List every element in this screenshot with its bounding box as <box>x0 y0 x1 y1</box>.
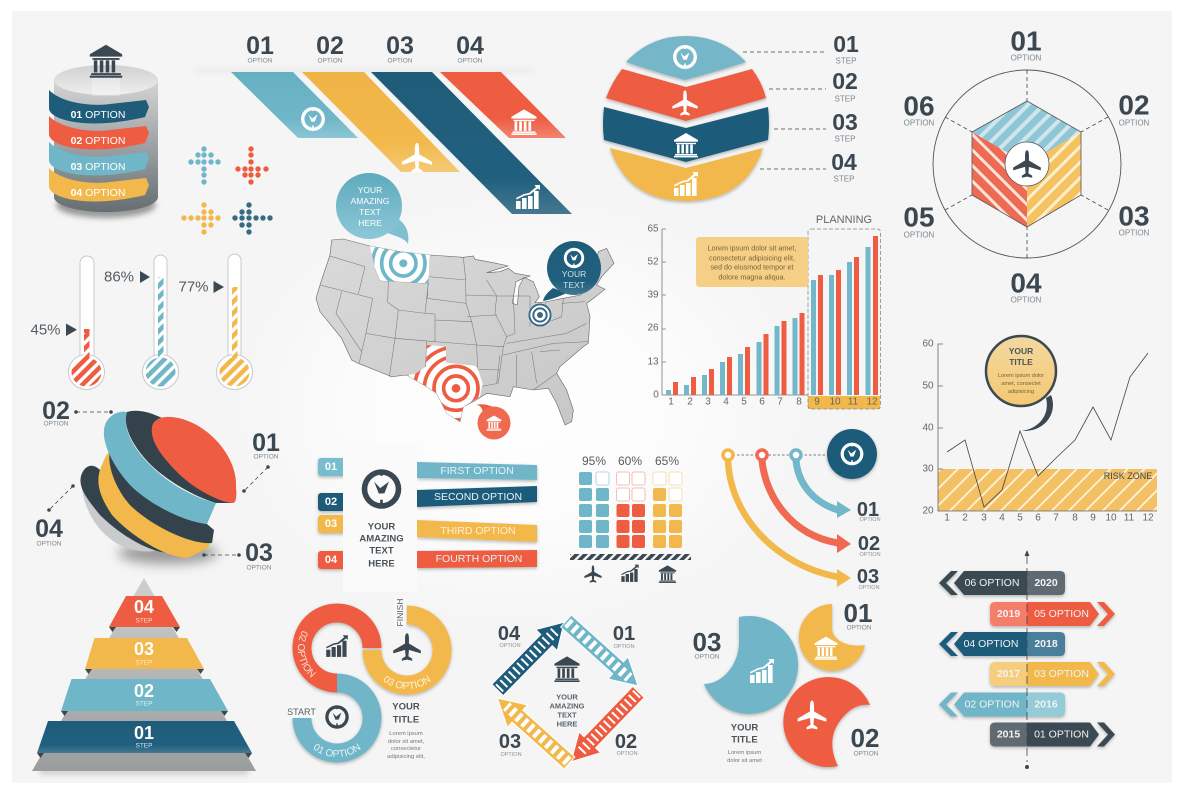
center glow <box>230 190 810 630</box>
panel: slanted option bands: OPTION <box>458 58 483 64</box>
panel: hexagon radar: 01 <box>1010 26 1042 56</box>
callout: navy bubble: TEXT <box>563 280 585 290</box>
panel: thermometers: 77% <box>178 278 209 296</box>
panel: step pyramid: 04 <box>134 597 154 617</box>
panel: layered sphere: OPTION <box>44 420 69 428</box>
bar chart: PLANNING <box>816 214 872 226</box>
panel: curved arrows <box>723 429 881 591</box>
line chart: RISK ZONE <box>1104 471 1152 481</box>
panel: circular steps: STEP <box>836 56 856 66</box>
callout: teal bubble: AMAZING <box>351 196 389 206</box>
panel: timeline: 05 OPTION <box>1034 608 1089 620</box>
panel: S-curve flow: START <box>287 707 316 717</box>
panel: timeline: 06 OPTION <box>965 577 1019 589</box>
bar chart: 3 <box>705 396 711 408</box>
bar chart: 65 <box>647 224 659 234</box>
panel: layered sphere: OPTION <box>247 564 272 572</box>
panel: slanted option bands: 04 <box>456 32 484 60</box>
panel: slanted option bands: 02 <box>316 32 344 60</box>
panel: curved arrows: OPTION <box>859 517 881 523</box>
line chart: 50 <box>922 380 934 392</box>
panel: thermometers: 45% <box>30 322 61 338</box>
bar chart <box>647 214 880 409</box>
panel: S-curve flow: 03 OPTION <box>384 675 431 689</box>
icon: dotted arrows <box>181 146 273 235</box>
line chart: 3 <box>981 512 987 524</box>
panel: curved arrows: OPTION <box>858 585 880 591</box>
panel: option list: 03 <box>325 518 337 530</box>
panel: option list: AMAZING <box>359 534 404 544</box>
bar chart: 4 <box>723 396 729 408</box>
callout: teal bubble <box>336 173 408 244</box>
line chart: 6 <box>1035 512 1041 524</box>
panel: option cylinder <box>49 45 158 218</box>
panel: timeline: 01 OPTION <box>1034 728 1089 740</box>
panel: S-curve flow: adipisicing elit, <box>387 754 425 760</box>
panel: diamond arrows: OPTION <box>500 752 522 758</box>
panel: curved arrows: 01 <box>857 499 879 521</box>
bar chart: sed do eiusmod tempor et <box>710 262 794 272</box>
bar chart: 26 <box>647 322 659 334</box>
panel: diamond arrows <box>487 610 649 774</box>
title circle: adipisicing <box>1008 389 1034 395</box>
panel: slanted option bands: 03 <box>386 32 414 60</box>
panel: S-curve flow <box>287 599 454 766</box>
panel: timeline: 2020 <box>1034 577 1058 589</box>
panel: circular steps <box>603 31 859 201</box>
panel: layered sphere: 04 <box>35 515 63 543</box>
state lines <box>320 255 588 390</box>
panel: slanted option bands: OPTION <box>248 58 273 64</box>
panel: thermometers: 86% <box>104 268 134 286</box>
panel: diamond arrows: 02 <box>615 731 637 753</box>
panel: option list: THIRD OPTION <box>440 525 516 537</box>
panel: timeline: 2016 <box>1034 698 1058 710</box>
panel: step pyramid: STEP <box>136 618 152 624</box>
title circle: YOUR <box>1009 346 1033 356</box>
bar chart: 11 <box>848 396 859 408</box>
panel: step pyramid: STEP <box>136 742 152 750</box>
title circle: TITLE <box>1009 357 1033 367</box>
panel: hexagon radar: OPTION <box>1119 228 1150 238</box>
line chart: 7 <box>1053 512 1059 524</box>
callout: teal bubble: YOUR <box>358 185 382 195</box>
panel: timeline: 2017 <box>997 668 1020 680</box>
panel: curved arrows: OPTION <box>859 552 881 558</box>
panel: crescent petals: dolor sit amet <box>727 758 762 764</box>
panel: diamond arrows: 04 <box>498 623 521 645</box>
panel: S-curve flow: 01 OPTION <box>314 743 361 757</box>
panel: step pyramid: 02 <box>134 681 154 701</box>
panel: timeline: 2018 <box>1034 638 1058 650</box>
panel: diamond arrows: 01 <box>613 623 635 645</box>
panel: hexagon radar: 04 <box>1010 268 1042 298</box>
panel: crescent petals: YOUR <box>731 722 758 734</box>
panel: diamond arrows: OPTION <box>613 644 635 650</box>
panel: option cylinder: 02 OPTION <box>71 135 125 147</box>
panel: layered sphere: 03 <box>245 539 273 567</box>
panel: S-curve flow: 02 OPTION <box>298 631 316 678</box>
panel: hexagon radar: OPTION <box>904 230 935 240</box>
panel: circular steps: STEP <box>835 134 855 144</box>
bar chart: 8 <box>796 396 802 408</box>
bar chart: consectetur adipisicing elit, <box>709 254 795 262</box>
target: Ohio <box>528 303 552 327</box>
line chart <box>922 336 1157 524</box>
line chart: 9 <box>1090 512 1096 524</box>
panel: diamond arrows: TEXT <box>557 710 577 720</box>
panel: S-curve flow: FINISH <box>395 599 405 626</box>
line chart: 10 <box>1105 512 1117 524</box>
callout: teal bubble: HERE <box>358 218 382 228</box>
panel: option list: TEXT <box>369 546 394 556</box>
panel: step pyramid <box>32 578 256 774</box>
panel: step pyramid: 03 <box>134 639 154 659</box>
panel: hexagon radar: OPTION <box>1119 118 1150 128</box>
panel: crescent petals <box>693 598 879 767</box>
panel: option list: HERE <box>368 558 395 570</box>
panel: percent grids: 60% <box>618 454 642 468</box>
panel: timeline: 03 OPTION <box>1034 668 1089 680</box>
line chart: 1 <box>944 512 950 524</box>
line chart: 30 <box>922 464 934 474</box>
line chart: 2 <box>962 512 968 524</box>
panel: S-curve flow: dolor sit amet, <box>388 739 425 745</box>
panel: option list: FOURTH OPTION <box>436 553 522 565</box>
panel: circular steps: 01 <box>833 31 859 57</box>
panel: crescent petals: Lorem ipsum <box>728 750 761 756</box>
panel: layered sphere: 01 <box>252 429 280 457</box>
panel: slanted option bands: OPTION <box>318 58 343 64</box>
panel: percent grids <box>570 454 691 583</box>
panel: crescent petals: TITLE <box>731 734 758 746</box>
panel: slanted option bands: OPTION <box>388 58 413 64</box>
bar chart: dolore magna aliqua. <box>718 272 786 282</box>
line chart: 60 <box>922 338 934 350</box>
panel: timeline: 04 OPTION <box>964 638 1018 650</box>
panel: hexagon radar: 05 <box>903 202 935 232</box>
target: Texas <box>406 345 482 422</box>
panel: step pyramid: STEP <box>136 700 152 708</box>
line chart: 5 <box>1017 512 1023 524</box>
bar chart: 9 <box>814 396 820 408</box>
panel: crescent petals: 03 <box>693 627 721 657</box>
panel: percent grids: 65% <box>655 454 679 468</box>
panel: diamond arrows: OPTION <box>499 643 521 649</box>
panel: circular steps: 04 <box>831 149 857 175</box>
line chart: 40 <box>922 422 934 434</box>
panel: hexagon radar: OPTION <box>1011 296 1042 304</box>
panel: option list <box>318 442 537 592</box>
panel: curved arrows: 03 <box>857 566 879 588</box>
line chart: 12 <box>1142 512 1154 524</box>
panel: S-curve flow: consectetur <box>391 746 421 752</box>
panel: circular steps: STEP <box>834 174 854 184</box>
line chart: 20 <box>922 506 934 516</box>
bar chart: 52 <box>647 256 659 268</box>
panel: hexagon radar: 02 <box>1118 90 1150 120</box>
panel: diamond arrows: YOUR <box>556 692 578 702</box>
title circle: amet, consectet <box>1001 381 1041 387</box>
panel: step pyramid: STEP <box>136 660 152 666</box>
panel: hexagon radar <box>903 26 1150 304</box>
panel: timeline: 02 OPTION <box>965 698 1019 710</box>
panel: step pyramid: 01 <box>134 723 154 743</box>
bar chart: 12 <box>866 396 878 408</box>
panel: thermometers <box>30 254 252 390</box>
panel: timeline <box>939 550 1115 769</box>
panel: diamond arrows: AMAZING <box>550 702 585 710</box>
panel: diamond arrows: HERE <box>557 720 577 728</box>
callout: teal bubble: TEXT <box>359 207 381 217</box>
map outline <box>316 239 614 425</box>
panel: option cylinder: 03 OPTION <box>71 161 125 173</box>
panel: option list: FIRST OPTION <box>440 465 514 477</box>
panel: hexagon radar: OPTION <box>1011 54 1042 62</box>
panel: hexagon radar: 03 <box>1118 200 1150 232</box>
callout: red bubble <box>476 404 510 440</box>
panel: layered sphere: OPTION <box>254 454 279 460</box>
panel: option cylinder: 01 OPTION <box>71 109 125 121</box>
panel: S-curve flow: YOUR <box>392 702 420 712</box>
line chart: 4 <box>999 512 1005 524</box>
panel: crescent petals: OPTION <box>854 750 879 758</box>
panel: layered sphere: 02 <box>42 397 70 425</box>
panel: option list: YOUR <box>368 522 395 532</box>
bar chart: 13 <box>647 356 659 368</box>
callout: navy bubble <box>543 241 601 301</box>
panel: crescent petals: 02 <box>851 723 879 753</box>
panel: circular steps: 03 <box>832 109 858 135</box>
title circle <box>986 336 1056 431</box>
line chart: 11 <box>1124 512 1135 524</box>
bar chart: 7 <box>777 396 783 408</box>
panel: S-curve flow: TITLE <box>393 714 419 726</box>
panel: timeline: 2015 <box>997 728 1020 740</box>
panel: crescent petals: 01 <box>844 598 872 628</box>
bar chart: 39 <box>647 290 659 300</box>
panel: circular steps: STEP <box>835 94 855 104</box>
bar chart: 5 <box>741 396 747 408</box>
panel: USA map <box>316 233 614 439</box>
panel: layered sphere: OPTION <box>37 540 62 548</box>
panel: timeline: 2019 <box>997 608 1020 620</box>
panel: layered sphere <box>35 397 280 572</box>
bar chart: 6 <box>759 396 765 408</box>
bar chart: 0 <box>653 390 659 400</box>
panel: option list: 04 <box>325 554 338 566</box>
title circle: Lorem ipsum dolor <box>998 373 1044 379</box>
panel: hexagon radar: OPTION <box>904 118 935 128</box>
panel: crescent petals: OPTION <box>847 624 872 632</box>
panel: option list: 01 <box>325 461 337 473</box>
bar chart: 10 <box>829 396 841 408</box>
panel: diamond arrows: OPTION <box>616 751 638 757</box>
panel: curved arrows: 02 <box>858 533 880 555</box>
panel: diamond arrows: 03 <box>499 731 521 753</box>
panel: slanted option bands: 01 <box>246 32 274 60</box>
line chart: 8 <box>1072 512 1078 524</box>
panel: option list: 02 <box>325 496 337 508</box>
callout: navy bubble: YOUR <box>562 269 586 279</box>
bar chart: 2 <box>687 396 693 408</box>
bar chart: 1 <box>668 396 674 408</box>
target: Montana <box>370 246 430 284</box>
panel: crescent petals: OPTION <box>695 654 720 660</box>
panel: slanted option bands <box>195 32 572 214</box>
panel: option list: SECOND OPTION <box>434 491 522 503</box>
panel: S-curve flow: Lorem ipsum <box>389 731 423 737</box>
panel: percent grids: 95% <box>582 454 606 468</box>
panel: hexagon radar: 06 <box>903 90 935 122</box>
panel: circular steps: 02 <box>832 68 858 94</box>
bar chart: Lorem ipsum dolor sit amet, <box>708 244 796 252</box>
panel: option cylinder: 04 OPTION <box>71 187 125 199</box>
